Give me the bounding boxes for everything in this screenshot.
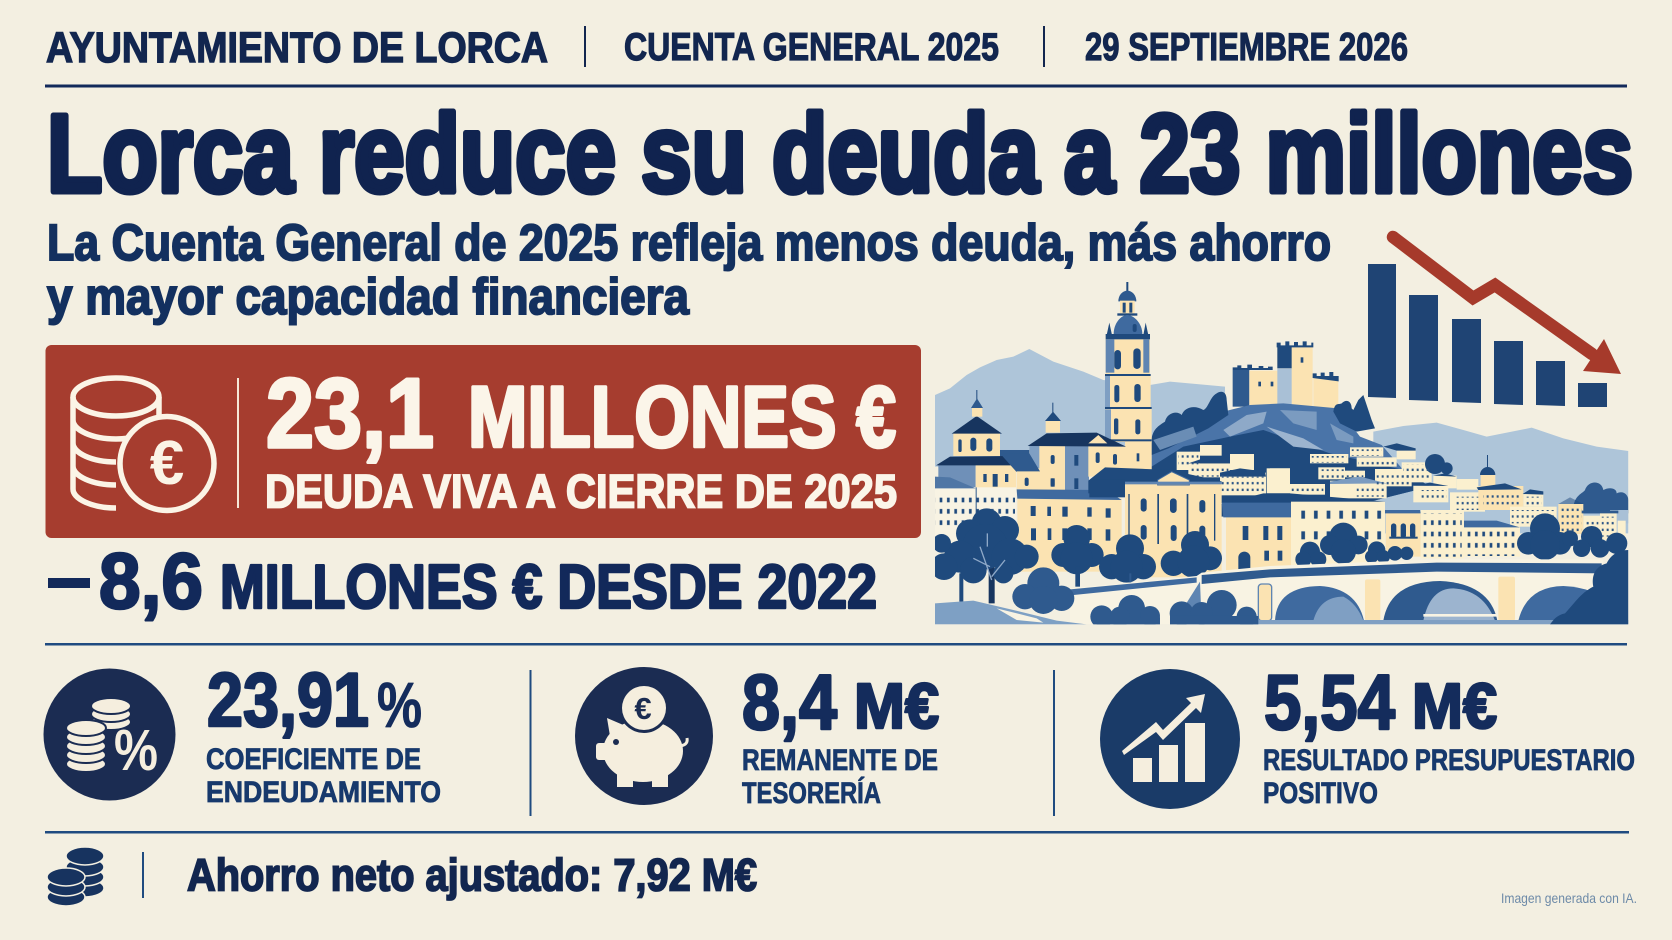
palace xyxy=(1088,467,1222,577)
savings text: Ahorro neto ajustado: 7,92 M€ xyxy=(187,850,757,900)
header: fecha: 29 SEPTIEMBRE 2026 xyxy=(1085,26,1408,69)
footer: ahorro neto xyxy=(47,847,757,906)
value: 23,91 xyxy=(207,658,369,743)
icon: coin stacks xyxy=(47,847,104,906)
icon: coin stack with euro: € xyxy=(150,429,184,498)
hill with trees xyxy=(1152,392,1429,503)
label xyxy=(1263,744,1635,810)
stat: coeficiente de endeudamiento xyxy=(44,658,441,809)
bell tower xyxy=(1105,282,1152,471)
value: M€ xyxy=(854,670,939,742)
value: 23,1 millones: MILLONES € xyxy=(468,370,896,466)
label: TESORERÍA xyxy=(742,776,881,810)
header: cuenta general: CUENTA GENERAL 2025 xyxy=(624,26,999,69)
label: POSITIVO xyxy=(1263,777,1378,810)
arrow: downward trend xyxy=(1393,237,1621,374)
panel: deuda viva xyxy=(46,345,921,538)
value: % xyxy=(377,669,422,741)
reduction headline: 8,6 xyxy=(99,536,203,625)
castle xyxy=(1233,341,1339,409)
value: 8,4 xyxy=(742,658,837,746)
label: deuda viva: DEUDA VIVA A CIERRE DE 2025 xyxy=(265,464,897,518)
icon: rising bar chart xyxy=(1100,669,1240,809)
subtitle xyxy=(47,214,1331,325)
reduction headline xyxy=(48,536,877,625)
credit note: Imagen generada con IA. xyxy=(1501,890,1637,906)
icon: piggy bank: € xyxy=(634,691,652,726)
subtitle: y mayor capacidad financiera xyxy=(47,268,690,325)
tree branches xyxy=(973,533,1005,580)
bars xyxy=(1368,264,1607,407)
trees xyxy=(931,508,1627,603)
label xyxy=(206,743,441,809)
foreground ground and bushes xyxy=(935,550,1628,628)
value xyxy=(742,658,939,746)
value: M€ xyxy=(1412,670,1497,742)
hillside houses xyxy=(1177,443,1485,512)
right church and distant buildings xyxy=(1477,455,1628,540)
label xyxy=(742,744,938,810)
reduction headline: MILLONES € DESDE 2022 xyxy=(220,553,877,622)
header: ayuntamiento: AYUNTAMIENTO DE LORCA xyxy=(46,24,548,72)
stone bridge xyxy=(1070,559,1628,624)
illustration: Lorca townscape xyxy=(931,282,1628,628)
right central buildings xyxy=(1222,493,1520,570)
label: ENDEUDAMIENTO xyxy=(206,776,441,809)
icon: piggy bank xyxy=(575,667,713,805)
value: 5,54 xyxy=(1264,658,1395,746)
stat: resultado presupuestario xyxy=(1100,658,1635,810)
domed chapel xyxy=(936,390,1055,489)
stat: remanente de tesorería xyxy=(575,658,939,810)
value xyxy=(1264,658,1497,746)
subtitle: La Cuenta General de 2025 refleja menos deuda, más ahorro xyxy=(47,214,1331,271)
label: COEFICIENTE DE xyxy=(206,743,421,776)
chart: declining bars with arrow xyxy=(1368,237,1621,407)
church xyxy=(1000,403,1127,491)
value: 23,1 millones: 23,1 xyxy=(266,358,434,468)
icon: coins and percent xyxy=(44,668,176,800)
mountains xyxy=(935,349,1628,533)
header bar xyxy=(45,24,1627,88)
icon: coins and percent: % xyxy=(114,718,158,783)
left town buildings xyxy=(935,477,1122,572)
label: REMANENTE DE xyxy=(742,744,938,777)
icon: coin stack with euro xyxy=(73,378,214,510)
value: 23,1 millones xyxy=(266,358,896,468)
